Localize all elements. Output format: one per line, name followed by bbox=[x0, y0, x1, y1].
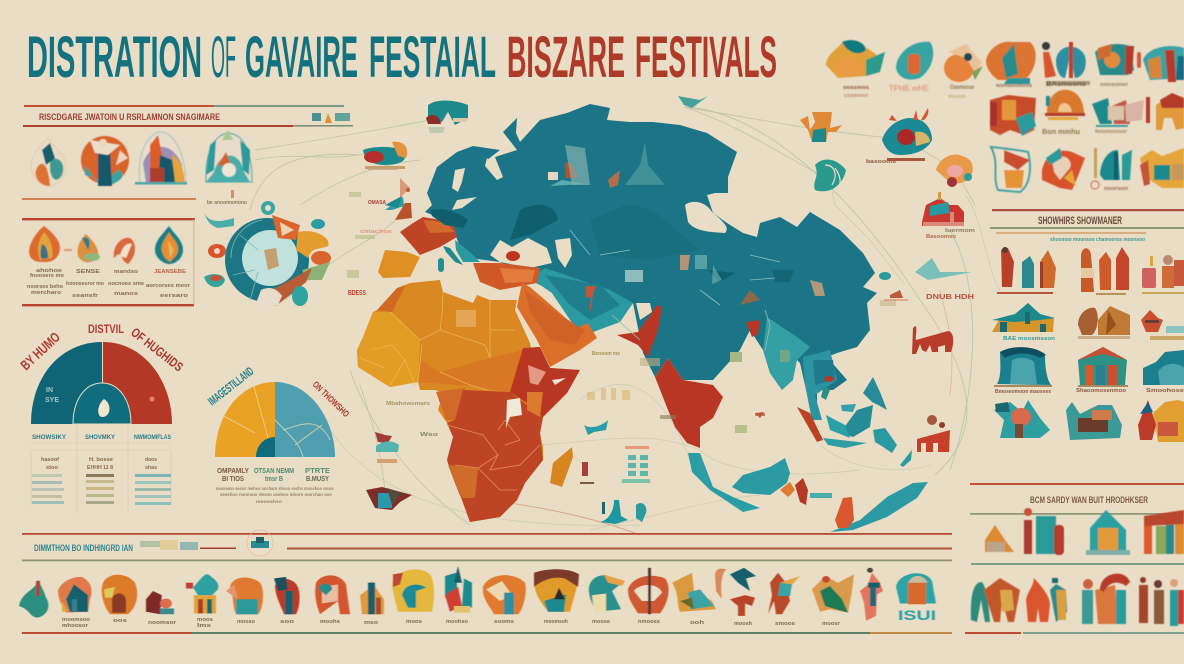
icon: temple bbox=[922, 192, 964, 227]
panel: right festival gallery bbox=[990, 209, 1184, 442]
caption: arch: Bon mmhu bbox=[1042, 129, 1080, 136]
caption: top-right row one bbox=[843, 82, 1128, 100]
land: eastern island bbox=[830, 482, 928, 532]
icon: robed trio bbox=[997, 247, 1056, 294]
captions: strip: smoos bbox=[775, 621, 795, 627]
gauge captions bbox=[217, 468, 330, 483]
region: Horn of Africa bbox=[510, 347, 580, 417]
chart: orange and teal semicircle gauge bbox=[205, 364, 351, 504]
table: gauge data: hasoof bbox=[41, 457, 59, 463]
Europe: France and Germany bbox=[400, 217, 457, 255]
mini icons: top-left heading bbox=[312, 113, 350, 123]
caption: top-right row one: noosonor bbox=[1100, 82, 1128, 88]
fire panel captions: ahohoe bbox=[36, 268, 62, 274]
chart: orange and teal semicircle gauge: seeshoo moonsor desno asshoo mhorn morchan soo bbox=[220, 492, 332, 497]
captions: strip: moose bbox=[592, 619, 610, 625]
captions: strip: nmooss bbox=[638, 619, 660, 625]
captions: strip: moos bbox=[197, 617, 213, 623]
gauge captions: tmsr B bbox=[265, 476, 283, 483]
panel: top-left festival gallery bbox=[22, 105, 353, 200]
icon: flame egg bbox=[29, 226, 60, 262]
icon: strip 17 bbox=[715, 568, 756, 616]
captions: strip: moos bbox=[406, 619, 422, 625]
chart: red and teal semicircle gauge: DISTVIL bbox=[88, 322, 124, 336]
Europe: Spain bbox=[378, 250, 420, 278]
region: Namibia bbox=[448, 465, 478, 498]
icon: peach figure bbox=[936, 155, 973, 187]
gallery row bbox=[971, 508, 1184, 626]
gauge labels: BY HUMO bbox=[17, 329, 63, 373]
fire panel captions: mandso bbox=[114, 269, 138, 275]
section heading: top-left: RISCDGARE JWATOIN U RSRLAMNON SNAGIMARE bbox=[39, 112, 220, 122]
gauge labels: IMAGESTILLAND bbox=[205, 364, 257, 408]
captions: strip: moosh bbox=[734, 621, 752, 627]
gauge inner value: IN bbox=[46, 387, 53, 394]
captions: strip: moomsoo bbox=[62, 617, 90, 623]
region label: Egypt block bbox=[456, 310, 476, 327]
icon: arched dancer bbox=[1042, 42, 1090, 85]
table: gauge data bbox=[31, 424, 172, 513]
gauge strokes bbox=[222, 383, 330, 457]
captions: strip: oos bbox=[113, 618, 127, 624]
icon: strip 3 bbox=[102, 575, 137, 614]
icon: upper map costume bbox=[426, 100, 468, 133]
icon: teal pavilion bbox=[994, 347, 1052, 387]
icon: teal pavilion right bbox=[1143, 350, 1184, 385]
icon: left side notes bbox=[347, 168, 398, 278]
captions: strip: moomsoh bbox=[544, 619, 568, 625]
icon: horned dancer bbox=[800, 112, 842, 142]
subheading rule text: shoomoo moonsoo chamooros moonsoo bbox=[1050, 237, 1145, 243]
ring orbit icons bbox=[204, 190, 331, 306]
fire panel captions: manos bbox=[114, 291, 138, 297]
icon: teal hut bbox=[992, 303, 1055, 332]
icon: data lozenges bbox=[622, 446, 650, 483]
gauge captions: OMPAMLY bbox=[217, 468, 249, 475]
caption: gateway: hoomonoor bbox=[1095, 129, 1127, 135]
captions: gallery rows bbox=[995, 388, 1184, 395]
map small labels: cmachoe bbox=[360, 229, 392, 235]
icon: southern shrine bbox=[366, 487, 412, 510]
icon: market stall bbox=[1140, 148, 1184, 188]
icon: strip 18 bbox=[768, 573, 800, 614]
chart: orange and teal semicircle gauge: meooshso bbox=[256, 499, 282, 504]
text: FESTIVALS bbox=[635, 25, 777, 90]
Europe: Balkans and Turkey bbox=[473, 263, 540, 290]
captions: strip: noomsor bbox=[148, 620, 176, 626]
map small labels: Wso bbox=[420, 432, 439, 438]
icon: strip 8 bbox=[315, 575, 350, 614]
icon: dancer in circle bbox=[81, 136, 129, 186]
icon: pumpkin group bbox=[986, 42, 1036, 84]
captions: gallery rows: Smoohose bbox=[1146, 388, 1184, 394]
caption: top-right row one: BAsmoons bbox=[1046, 82, 1087, 88]
caption: top-right row one: TPHE wHE bbox=[889, 84, 930, 93]
icon: teal pillars: noorson bbox=[1104, 186, 1128, 192]
chart: red and teal semicircle gauge: OF HUGHIDS bbox=[128, 325, 186, 375]
icon: drums and figures bbox=[1142, 255, 1184, 294]
icon: brown mounds bbox=[1078, 306, 1130, 339]
panel: bottom festival strip bbox=[19, 530, 952, 634]
table: gauge data: doos bbox=[145, 457, 157, 463]
icon: Asia festival cluster bbox=[347, 96, 973, 528]
icon: teal sea figures bbox=[600, 500, 646, 524]
icon: flower dance bbox=[1042, 148, 1085, 190]
chart: red and teal semicircle gauge bbox=[17, 322, 186, 424]
strip icons bbox=[19, 566, 936, 624]
gauge centre mark bbox=[98, 399, 110, 417]
captions: strip: sooms bbox=[494, 619, 514, 625]
sea cutouts bbox=[452, 158, 727, 320]
table: gauge data: NWMOMIFLAS bbox=[134, 434, 172, 441]
icon: camel troupe bbox=[971, 578, 1020, 622]
region: Middle East bbox=[530, 268, 633, 332]
icon: strip 21 with banner bbox=[896, 573, 936, 624]
fire panel captions: noorses beho bbox=[27, 284, 63, 290]
chart: orange and teal semicircle gauge: moonson sesns mehos nocharn shoon secho mooshoo ssnor bbox=[216, 486, 334, 491]
chart: ring diagram bbox=[204, 190, 331, 306]
icon: strip 6 bbox=[226, 577, 263, 614]
fire panel captions: SENSE bbox=[76, 269, 101, 275]
peninsula: south strip bbox=[688, 453, 760, 512]
captions: strip: mso bbox=[364, 620, 378, 626]
icon: orange arch bbox=[1045, 90, 1085, 120]
icon: strip 16 bbox=[672, 573, 716, 612]
icon: orange dome bbox=[985, 525, 1014, 552]
captions: gallery rows: Bmoseomoon maosees bbox=[995, 389, 1051, 395]
icon: figures red teal bbox=[1024, 508, 1064, 555]
table: gauge data: EHHH 11 8 bbox=[87, 465, 113, 471]
icon: teal tent bbox=[1086, 510, 1130, 555]
caption: teal hut: BAE moosmsson bbox=[1003, 336, 1056, 342]
icon: teal troupe bbox=[1143, 46, 1184, 82]
fire panel captions: mercharo bbox=[31, 290, 61, 296]
icon: pale yellow marks bbox=[587, 388, 630, 400]
islands: Southeast Asia bbox=[797, 272, 912, 467]
icon: flame leaf bbox=[114, 238, 135, 264]
icon: red elephant sign bbox=[912, 326, 953, 354]
captions: gallery rows: Shaoomosenmoo bbox=[1076, 388, 1127, 394]
continent: Africa bbox=[357, 280, 580, 522]
icon: crowd bbox=[1139, 577, 1184, 626]
table: gauge data: stoo bbox=[46, 465, 59, 471]
icon: strip 7 bbox=[274, 577, 300, 614]
mini icons: bottom heading bbox=[140, 540, 198, 550]
fire panel captions: JEANSEBE bbox=[154, 269, 187, 275]
icon: shrine on coast bbox=[884, 290, 908, 301]
panel: lower-right festival gallery bbox=[965, 483, 1184, 634]
icon: camel rider bbox=[1146, 93, 1184, 130]
captions: strip: moohs bbox=[320, 619, 340, 625]
fire panel captions: fnoosers mo bbox=[30, 273, 64, 279]
icon: bird bbox=[678, 96, 708, 108]
title: FESTAIAL bbox=[369, 25, 496, 90]
captions: strip: mhoosor bbox=[62, 623, 88, 629]
icon: fruit bowl bbox=[363, 142, 407, 169]
captions: strip: ooh bbox=[690, 620, 704, 626]
title: GAVAIRE bbox=[245, 25, 358, 90]
region: Morocco bbox=[377, 286, 405, 312]
map small labels: Iuermom bbox=[945, 228, 976, 234]
icon: flame bulb bbox=[155, 226, 183, 264]
world map bbox=[348, 104, 976, 532]
island: Madagascar bbox=[550, 447, 573, 487]
icon: yellow palace bbox=[1138, 400, 1184, 442]
icon: strip 5 bbox=[186, 574, 218, 613]
fire panel captions: seansfr bbox=[72, 293, 98, 299]
chart: red and teal semicircle gauge: SYE bbox=[45, 397, 59, 404]
ring centre figure bbox=[264, 248, 279, 270]
map small labels: OMASA bbox=[368, 200, 386, 206]
icon: strip 1 bbox=[19, 579, 48, 618]
icon: orange gourd bbox=[944, 44, 983, 82]
icon: red drip banner bbox=[990, 95, 1036, 136]
icon: flame bowl bbox=[64, 234, 100, 262]
icon: strip 21 with banner: ISUI bbox=[898, 608, 936, 624]
table: gauge data: SHOVMKY bbox=[85, 434, 116, 441]
section heading: bottom strip: DIMMTHON BO INDHINGRD IAN bbox=[34, 543, 133, 553]
panel: fire festivals bbox=[22, 218, 195, 306]
icon: festival mask bbox=[882, 108, 932, 161]
icon: strip 9 bbox=[360, 581, 384, 614]
title: DISTRATION bbox=[27, 25, 202, 90]
icon: small sea nodes bbox=[375, 432, 399, 463]
icon: arch procession bbox=[1082, 574, 1130, 624]
captions: strip bbox=[62, 617, 840, 629]
map small labels: Basoomsn bbox=[926, 234, 956, 240]
icon: seated reveler bbox=[1095, 44, 1141, 75]
country borders bbox=[360, 292, 515, 390]
caption: top-right row one: oossmos bbox=[843, 85, 869, 91]
fire panel captions bbox=[27, 268, 190, 299]
icon: strip 13 bbox=[534, 569, 579, 612]
icon: pale temple bbox=[915, 258, 972, 280]
icon: strip 14 bbox=[589, 574, 625, 612]
map small labels: basooms bbox=[866, 159, 896, 165]
icon: teal gateway bbox=[1092, 98, 1144, 127]
gauge captions: B.MUSY bbox=[306, 476, 329, 483]
title: BISZARE bbox=[507, 25, 625, 90]
icon: fountain dome bbox=[206, 130, 252, 182]
map small labels: BDESS bbox=[348, 290, 366, 297]
icon: strip 19 bbox=[812, 574, 854, 613]
continent: Arabia bbox=[517, 283, 597, 367]
caption: top-right row one: Oaonoose bbox=[950, 85, 975, 91]
gallery row: figures bbox=[992, 247, 1184, 442]
icon: strip 20 bbox=[860, 568, 883, 621]
icon: swirl dancer bbox=[991, 147, 1030, 192]
map small labels: Benoom me bbox=[592, 351, 620, 357]
icon: island dancer bbox=[780, 478, 854, 528]
icon: costumed trio bbox=[1081, 247, 1129, 295]
icon: map mini markers bbox=[580, 300, 896, 484]
title bbox=[27, 25, 777, 90]
Europe: north shade bbox=[430, 209, 468, 228]
map small labels bbox=[348, 159, 976, 438]
map small labels: Mbahowsmaro bbox=[386, 401, 431, 407]
captions: strip: moosr bbox=[822, 621, 840, 627]
captions: strip: mooso bbox=[237, 619, 255, 625]
gauge captions: BI TIOS bbox=[222, 476, 244, 483]
gauge captions: OTSAN NEMM bbox=[254, 468, 294, 475]
marker: Bangladesh bbox=[746, 320, 760, 337]
icon: drop figure bbox=[31, 138, 66, 186]
section heading: right gallery: SHOWHIRS SHOWMANER bbox=[1038, 215, 1122, 227]
captions: strip: moohso bbox=[446, 619, 468, 625]
icon: strip 2 bbox=[58, 577, 92, 613]
icon: strip 12 bbox=[483, 575, 526, 614]
Europe: Italy bbox=[443, 246, 463, 265]
icon: teal pillars bbox=[1091, 148, 1132, 192]
fire panel captions: aorcorses meor bbox=[146, 283, 190, 289]
country: Oman strip bbox=[617, 305, 662, 357]
chart: orange and teal semicircle gauge: ON THOWSHO bbox=[311, 379, 351, 419]
icon: parade animal bbox=[994, 400, 1050, 438]
captions: strip: soo bbox=[280, 619, 294, 625]
icon: sacred bird bbox=[814, 160, 846, 191]
map figures bbox=[400, 142, 825, 362]
icon: coastal banner bbox=[385, 188, 410, 208]
icon: orange and teal pair bbox=[1026, 578, 1067, 622]
country: India bbox=[655, 358, 723, 448]
icon: heading medallion bbox=[247, 530, 273, 556]
icon: striped tent bbox=[1078, 347, 1128, 387]
title: OF bbox=[211, 25, 236, 90]
fire panel captions: oocnoes sme bbox=[108, 281, 144, 287]
icon: red temple figures bbox=[917, 415, 950, 452]
map small labels: DNUB HDH bbox=[926, 294, 974, 301]
icon: feast bowl bbox=[826, 40, 885, 78]
icon: strip 15 bbox=[628, 568, 669, 614]
icon: strip 10 bbox=[392, 569, 434, 612]
Europe: Britain and Ireland bbox=[385, 197, 412, 220]
gauge captions: PTRTE bbox=[305, 468, 330, 475]
panel: top-right festival icons bbox=[826, 40, 1184, 192]
table: gauge data: SHOWSIKY bbox=[32, 434, 67, 441]
region: west Africa bbox=[357, 312, 420, 387]
icon: elephant crowd bbox=[1066, 402, 1122, 440]
land: southern island bbox=[732, 458, 790, 495]
continent: Eurasia bbox=[425, 104, 877, 407]
icon: strip 11 bbox=[445, 566, 472, 613]
region: Southeast Asia light bbox=[763, 317, 810, 390]
caption: top-right row one: dmooh bbox=[948, 94, 966, 100]
fire panel captions: eersaro bbox=[160, 293, 188, 299]
network lines bbox=[250, 107, 1000, 535]
table: gauge data: H. bosse bbox=[89, 457, 113, 463]
caption: top-right row one: wsmaoomoos bbox=[995, 83, 1032, 89]
region: Sahel bbox=[418, 350, 523, 392]
icon: teal ball bbox=[896, 42, 933, 80]
region: central and southern Africa bbox=[447, 390, 543, 522]
gauge caption text near ring: be anoomsmonu bbox=[207, 200, 247, 206]
captions: strip: Ims bbox=[197, 623, 211, 629]
icon: mixed figures bbox=[1144, 510, 1184, 554]
table: gauge data: shas bbox=[145, 465, 157, 471]
caption: top-right row one: cosmoon bbox=[844, 93, 868, 99]
region: Eastern Asia shade bbox=[590, 205, 700, 260]
fire panel captions: hoonsesror mo bbox=[66, 281, 104, 287]
icon: red figure lamp bbox=[1141, 310, 1184, 340]
small heading rule bbox=[22, 198, 196, 200]
icon: dome shrine bbox=[135, 132, 187, 184]
icon: strip 4 bbox=[146, 591, 174, 614]
